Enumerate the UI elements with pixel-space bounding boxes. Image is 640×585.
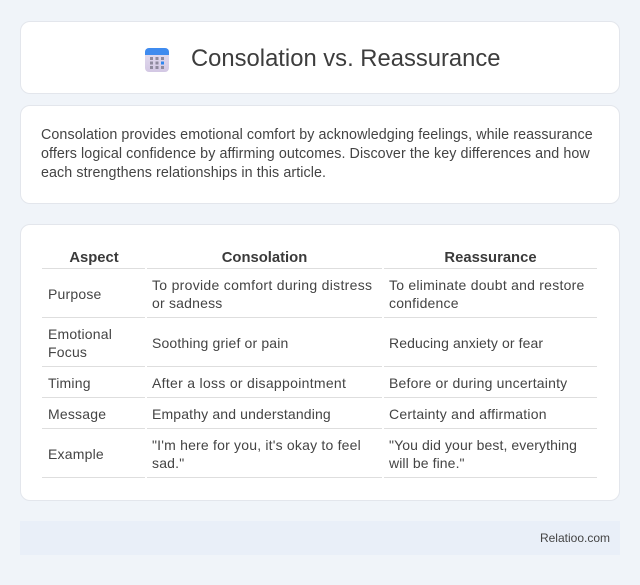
row: emotional focus: Soothing grief or pain — [152, 335, 288, 351]
row: purpose: or sadness — [152, 295, 222, 311]
row: example: Example — [48, 446, 104, 462]
footer text: Relatioo.com — [540, 531, 610, 545]
icon: calendar — [145, 48, 169, 72]
header row: Consolation — [222, 250, 307, 266]
row: example: sad." — [152, 455, 184, 471]
intro text: Consolation provides emotional comfort by acknowledging feelings, while reassurance — [41, 127, 593, 143]
row: emotional focus: Focus — [48, 344, 87, 360]
footer — [20, 521, 620, 555]
row: emotional focus: Reducing anxiety or fear — [389, 335, 543, 351]
row: purpose: To provide comfort during distress — [152, 277, 372, 293]
table card — [20, 224, 620, 501]
row: emotional focus: Emotional — [48, 326, 112, 342]
row: message — [48, 406, 547, 422]
header row: Reassurance — [444, 250, 537, 266]
row: example: "You did your best, everything — [389, 437, 577, 453]
row: timing: Before or during uncertainty — [389, 375, 567, 391]
row: message: Empathy and understanding — [152, 406, 331, 422]
row: message: Message — [48, 406, 106, 422]
row: example — [48, 437, 577, 471]
row: timing: After a loss or disappointment — [152, 375, 346, 391]
intro text: offers logical confidence by affirming outcomes. Discover the key differences and how — [41, 146, 590, 162]
title card — [20, 21, 620, 94]
row: purpose: confidence — [389, 295, 459, 311]
row: message: Certainty and affirmation — [389, 406, 547, 422]
comparison table — [42, 250, 597, 478]
row: purpose: Purpose — [48, 286, 102, 302]
row: purpose — [48, 277, 585, 311]
row: emotional focus — [48, 326, 543, 360]
intro card — [20, 105, 620, 204]
row: example: "I'm here for you, it's okay to feel — [152, 437, 361, 453]
title: Consolation vs. Reassurance — [191, 45, 501, 72]
row: timing: Timing — [48, 375, 91, 391]
intro text — [41, 127, 593, 181]
row: purpose: To eliminate doubt and restore — [389, 277, 585, 293]
header row — [69, 250, 537, 266]
header row: Aspect — [69, 250, 119, 266]
intro text: each strengthens relationships in this article. — [41, 165, 326, 181]
row: timing — [48, 375, 568, 391]
row: example: will be fine." — [389, 455, 465, 471]
